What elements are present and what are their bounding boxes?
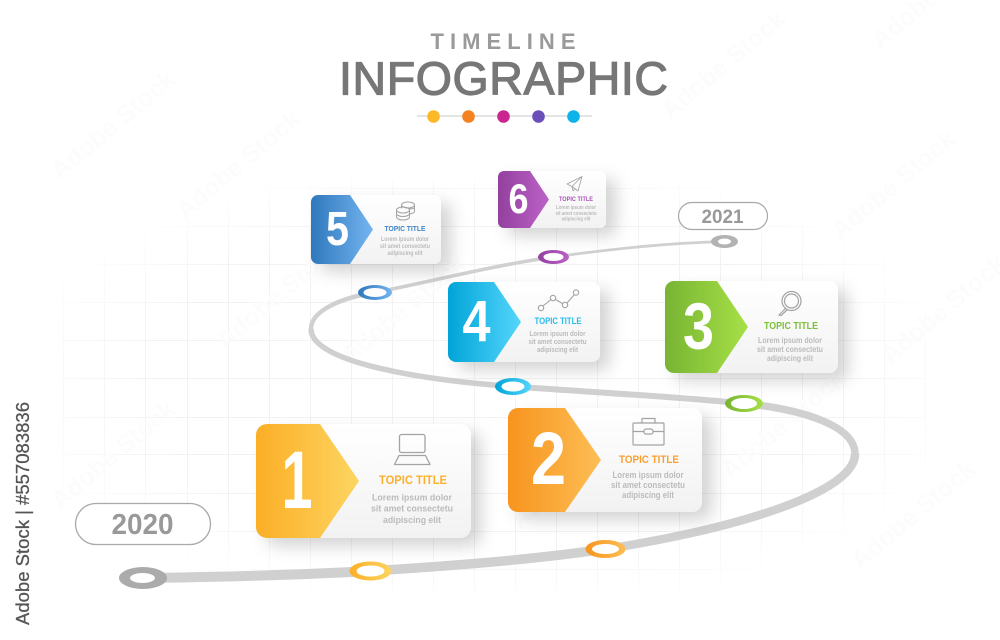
watermarks: Adobe Stock [171,105,306,225]
marker: step 6 [538,250,569,264]
title [339,29,668,104]
number badge 1 [256,424,359,538]
label: 2020: 2020 [112,509,174,541]
number 4: 4 [462,289,490,354]
description 3: Lorem ipsum dolor [758,336,822,345]
description 1: adipiscing elit [383,515,442,526]
description 4: Lorem ipsum dolor [530,331,586,338]
title dots [417,110,592,123]
description 1: sit amet consectetu [371,504,453,514]
number badge 4 [448,282,521,362]
description 5: adipiscing elit [388,251,422,257]
number 2: 2 [531,417,566,500]
description 6: adipiscing elit [562,216,591,222]
description 6 [556,205,596,222]
marker: step 1 [350,562,392,580]
panel: card 3 [665,281,838,373]
watermarks: Adobe Stock [846,455,981,575]
icon: paper plane [567,176,582,191]
topic title 5: TOPIC TITLE [384,224,426,233]
icon: line chart [538,290,579,311]
icon: magnifier [779,292,801,316]
description 1 [371,492,453,526]
panel: card 5 [311,195,441,264]
icon: laptop [394,434,430,464]
watermarks: Adobe Stock [656,5,791,125]
description 3: adipiscing elit [767,354,813,363]
title: TIMELINE [430,29,576,54]
topic title 6: TOPIC TITLE [559,196,593,203]
watermarks: Adobe Stock [46,65,181,185]
description 4: adipiscing elit [537,347,579,354]
number badge 3 [665,281,748,373]
number badge 6 [498,171,549,228]
number 3: 3 [683,289,714,363]
marker: step 5 [358,285,392,300]
watermarks: Adobe Stock [46,395,181,515]
description 2: sit amet consectetu [611,480,685,490]
description 4 [528,331,586,354]
panel: card 1 [256,424,471,538]
description 6: sit amet consectetu [556,211,596,217]
label: 2020 [76,504,210,544]
marker: step 3 [725,395,763,412]
background grid [92,195,888,575]
topic title 1: TOPIC TITLE [379,473,447,487]
number 5: 5 [326,203,349,256]
marker: step 2 [586,540,626,558]
number badge 2 [508,408,601,512]
winding road [143,242,855,578]
icon: briefcase [633,418,664,445]
marker: step 4 [495,378,531,395]
description 3: sit amet consectetu [757,345,823,354]
watermarks: Adobe Stock [211,235,346,355]
watermarks: Adobe Stock [336,250,471,370]
description 4: sit amet consectetu [528,339,586,346]
side credit: Adobe Stock | #557083836 [13,402,33,625]
description 2 [611,470,685,500]
description 5: sit amet consectetu [380,244,430,250]
description 6: Lorem ipsum dolor [556,205,596,211]
watermarks: Adobe Stock [716,365,851,485]
panel: card 6 [498,171,606,228]
watermarks: Adobe Stock [826,125,961,245]
marker: 2020 start [119,567,167,589]
panel: card 2 [508,408,702,512]
number 6: 6 [508,175,528,222]
label: 2021: 2021 [702,206,744,228]
marker: 2021 end [711,235,738,248]
description 5 [380,237,430,257]
description 2: adipiscing elit [622,490,674,500]
topic title 3: TOPIC TITLE [764,321,818,332]
number badge 5 [311,195,373,264]
title: INFOGRAPHIC [339,52,668,104]
label: 2021 [678,202,768,230]
panel: card 4 [448,282,600,362]
icon: coins [396,202,415,220]
description 5: Lorem ipsum dolor [381,237,430,243]
description 1: Lorem ipsum dolor [372,492,452,504]
description 3 [757,336,823,363]
description 2: Lorem ipsum dolor [612,470,684,480]
topic title 2: TOPIC TITLE [619,454,679,466]
number 1: 1 [282,435,312,526]
watermarks: Adobe Stock [506,415,641,535]
topic title 4: TOPIC TITLE [534,316,582,326]
